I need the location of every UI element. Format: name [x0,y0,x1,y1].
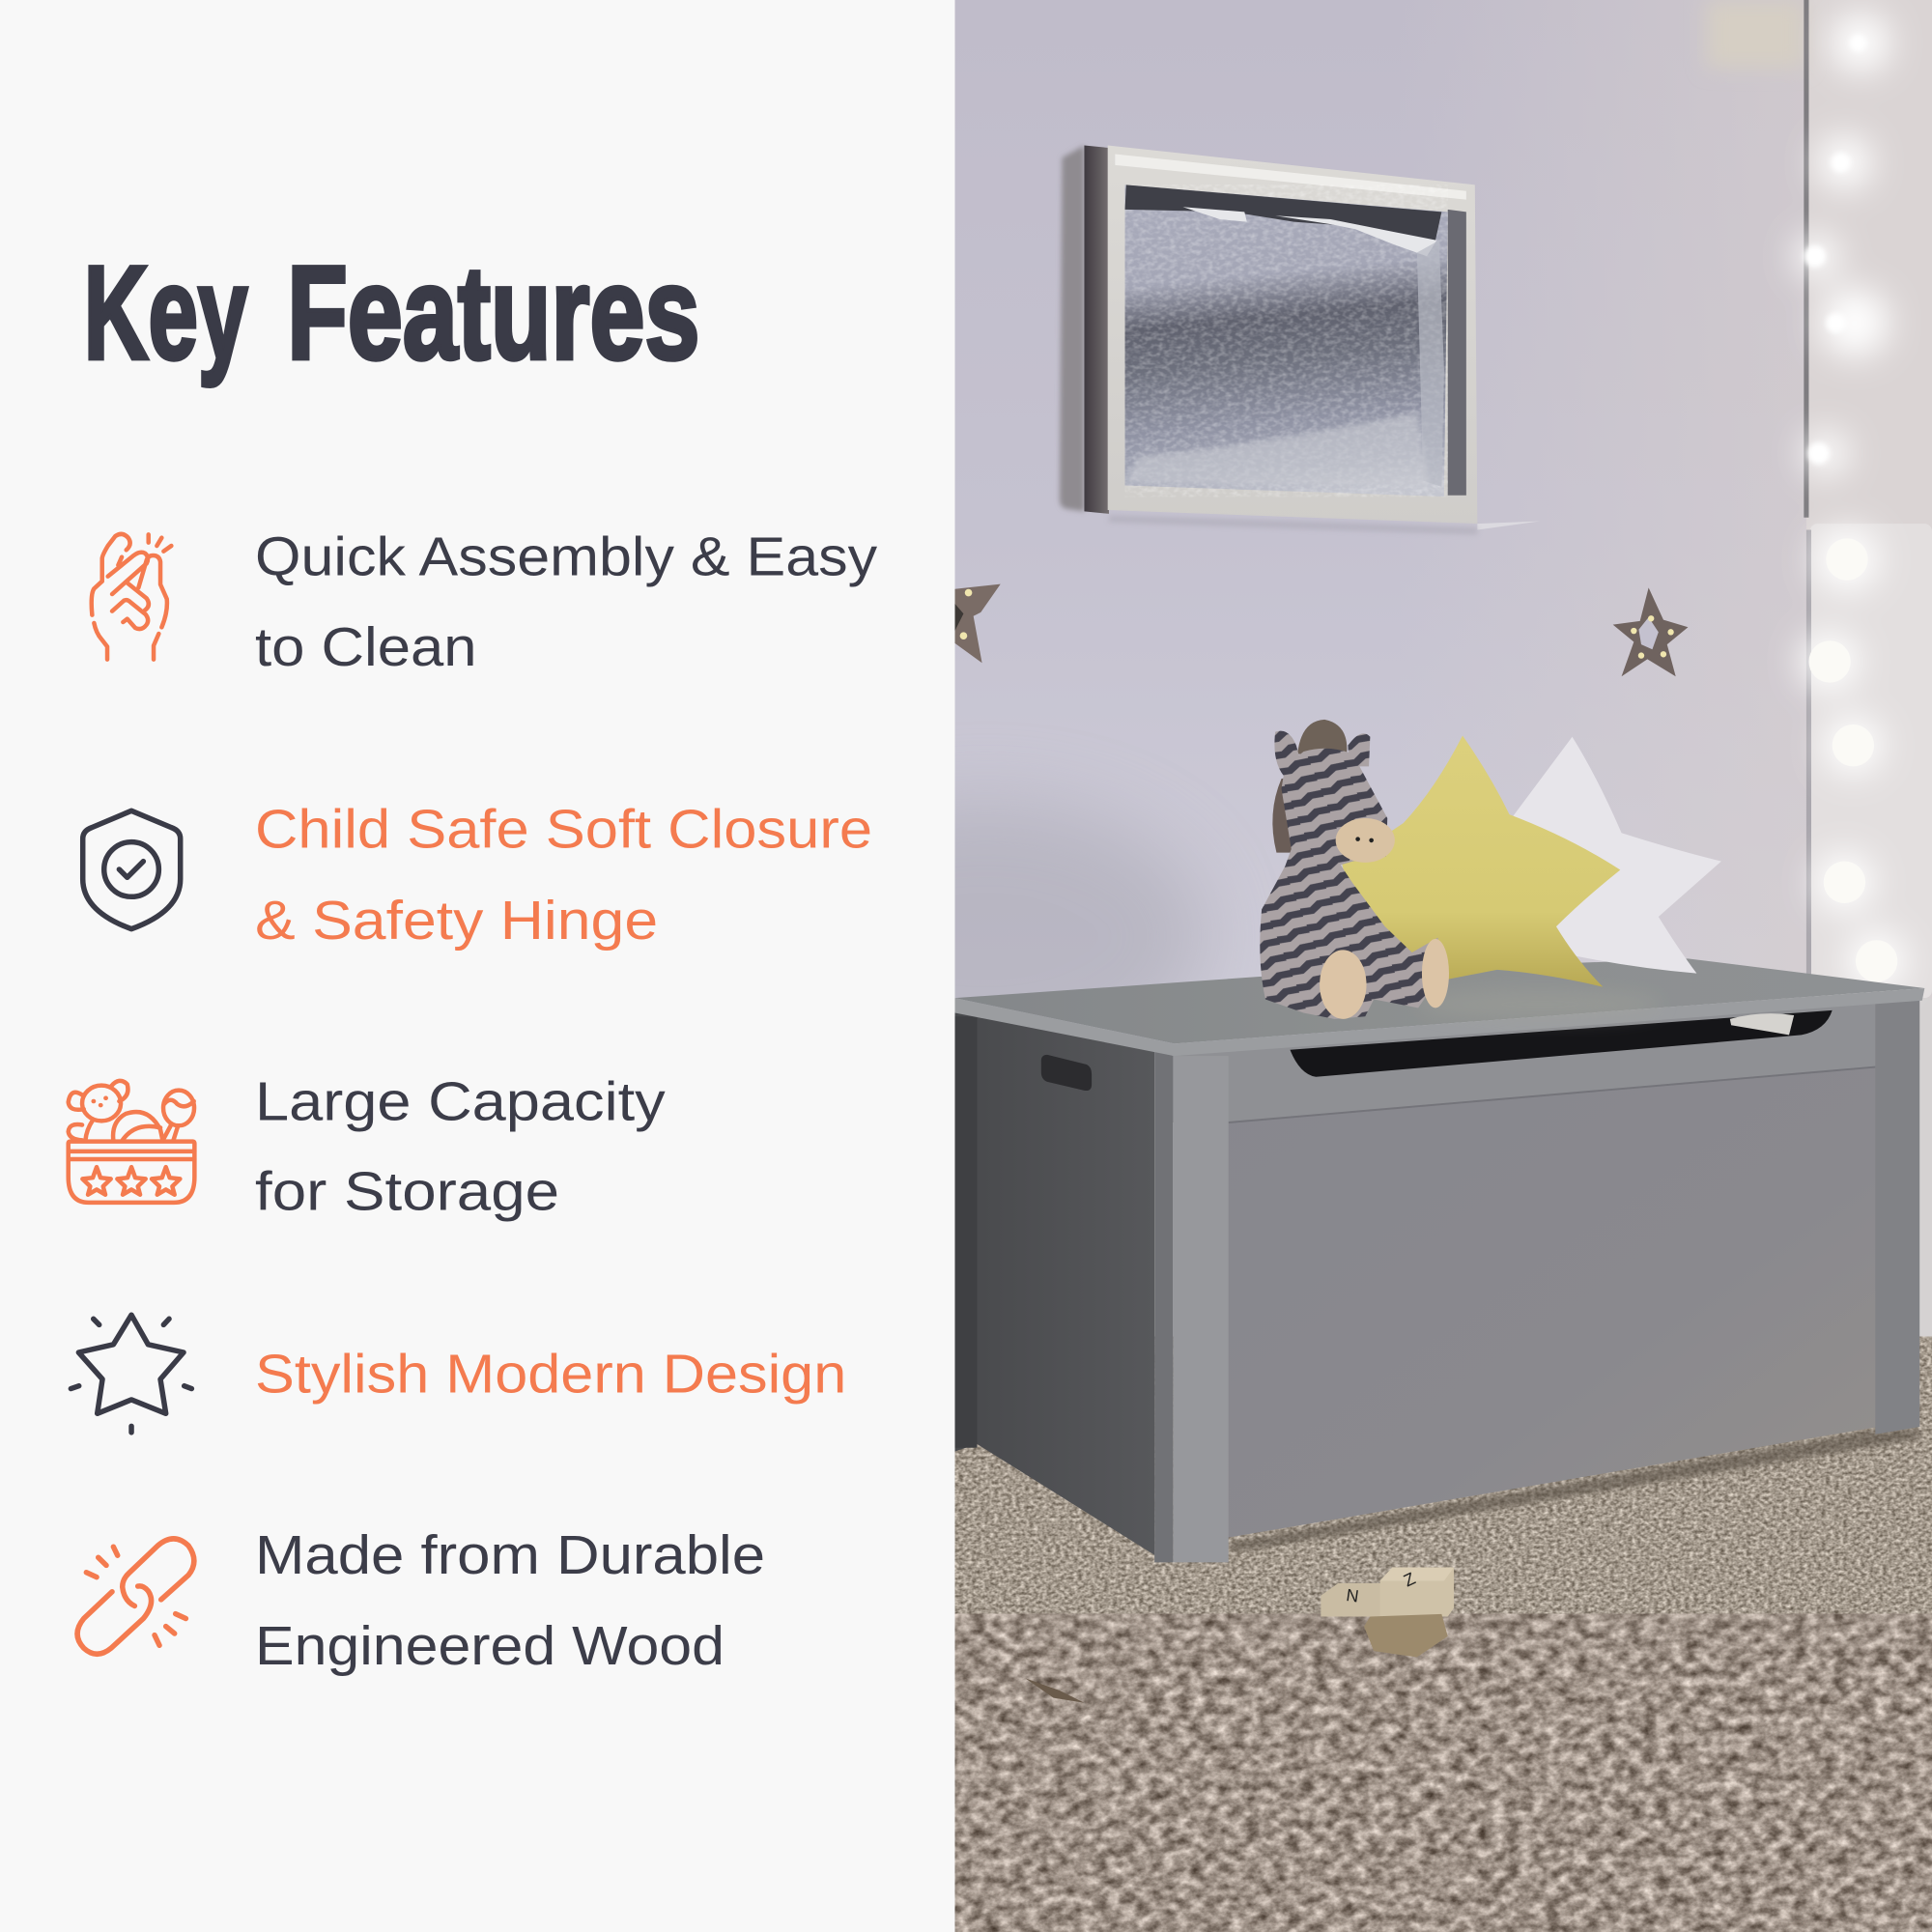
front panel [1220,1060,1886,1539]
title: Key [84,239,247,387]
reflection on lid [1417,989,1663,1019]
lid top [955,958,1924,1043]
lower carpet [955,1614,1932,1932]
wall picture frame [1060,146,1540,529]
wall star left, cropped [955,584,1001,663]
icon: star with rays [71,1315,191,1433]
left front post [1173,1056,1229,1562]
white star pillow [1511,737,1721,974]
feature: child safe [83,799,872,951]
text: durable wood: Engineered Wood [255,1615,724,1676]
hinge [1730,1013,1794,1035]
string lights [1795,14,1906,991]
text: durable wood: Made from Durable [255,1524,765,1585]
text: quick assembly: to Clean [255,616,477,677]
frame shadow on wall [1109,515,1477,535]
carpet debris [1025,1678,1084,1703]
feature: durable wood [77,1524,765,1676]
lid edge [955,988,1924,1056]
icon: toy basket [69,1081,194,1203]
chest side [955,1010,1154,1555]
icon: chain link [77,1539,194,1654]
hand slot [1290,1010,1833,1077]
text: quick assembly: Quick Assembly & Easy [255,526,877,587]
lid front rail [1158,1001,1880,1122]
feature: large capacity [69,1070,666,1222]
text: large capacity: Large Capacity [255,1070,666,1131]
panel: product photo scene [954,0,1932,1932]
title [84,239,699,387]
text: child safe [255,799,872,951]
text: quick assembly [255,526,877,677]
curtain and cupboard at right [1707,0,1932,1343]
feature: quick assembly [92,526,877,677]
wall star right [1613,587,1688,676]
text: large capacity [255,1070,666,1222]
icon: shield with check [83,810,181,929]
wall [764,0,1932,1072]
right front post [1875,993,1919,1435]
text: stylish design: Stylish Modern Design [255,1343,846,1404]
wooden blocks [1321,1567,1454,1658]
feature: stylish design [71,1315,846,1433]
icon: snapping fingers [92,534,171,660]
yellow star pillow [1341,735,1620,987]
text: large capacity: for Storage [255,1161,559,1222]
text: child safe: & Safety Hinge [255,890,658,951]
text: child safe: Child Safe Soft Closure [255,799,872,860]
upper carpet [955,1337,1932,1627]
wooden blocks: Z [1401,1569,1418,1590]
text: durable wood [255,1524,765,1676]
toy chest [955,958,1924,1562]
carpet shadow at chest [1229,1430,1919,1552]
title: Features [287,239,699,387]
rail shadow line [1229,1067,1875,1122]
panel: left feature list background [0,0,955,1932]
wooden blocks: N [1345,1585,1360,1606]
side handle [1041,1055,1092,1091]
zebra plush [1260,720,1449,1019]
